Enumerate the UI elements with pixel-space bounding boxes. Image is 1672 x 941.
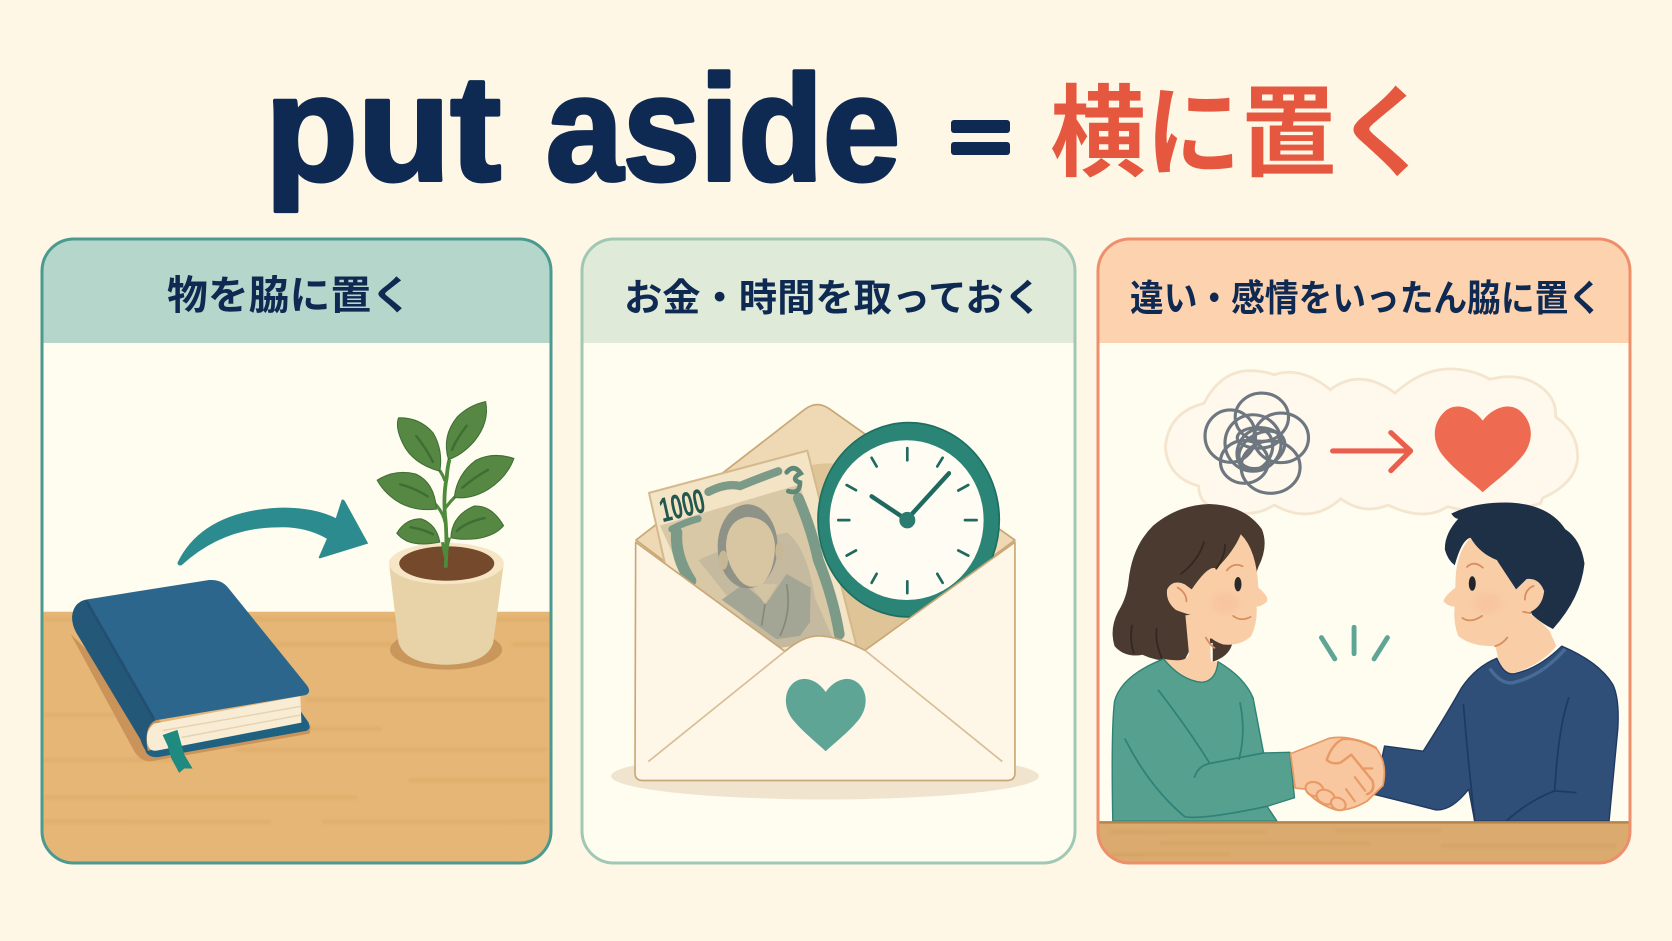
person: woman: [1112, 504, 1294, 821]
title: word put: put: [265, 44, 501, 212]
icon: potted plant: [377, 402, 514, 670]
banknote denomination: 1000: [656, 482, 709, 530]
panel 2 heading: お金・時間を取っておく: [624, 278, 1042, 320]
arrow: tangle to heart: [1333, 433, 1411, 471]
spark marks: [1321, 627, 1387, 659]
scene: book moved beside plant: [30, 402, 570, 873]
envelope front: [635, 542, 1015, 780]
banknote: [649, 451, 860, 660]
envelope fold lines: [648, 650, 1002, 762]
arrow: book to plant: [177, 500, 368, 565]
panel: objects: [30, 239, 570, 873]
panel 3 heading: 違い・感情をいったん脇に置く: [1130, 278, 1602, 319]
panel 1 heading: 物を脇に置く: [167, 274, 412, 318]
panel 3 border: [1098, 239, 1630, 863]
panel 2 border: [582, 239, 1075, 863]
title: word aside: aside: [546, 44, 900, 212]
person: man: [1374, 502, 1618, 821]
title: equals sign: [951, 120, 1010, 155]
panel 1 header band: [42, 239, 551, 343]
panel 1 border: [42, 239, 551, 863]
banknote ornaments: [672, 468, 839, 634]
scene: envelope with bill and clock: [611, 405, 1039, 799]
icon: heart seal: [786, 679, 866, 751]
title: japanese meaning: 横に置く: [1050, 78, 1432, 190]
thought cloud: [1165, 369, 1578, 514]
panel 1 background: [42, 239, 551, 863]
wooden table: [44, 612, 550, 862]
panel 2 header band: [582, 239, 1075, 343]
table edge: [1100, 821, 1628, 862]
panel 3 header band: [1098, 239, 1630, 343]
icon: heart: [1435, 407, 1531, 492]
envelope inner shade: [810, 463, 937, 650]
panel 2 background: [582, 239, 1075, 863]
title: [265, 44, 1432, 212]
envelope shadow: [611, 753, 1039, 799]
panel: money and time: [582, 239, 1075, 863]
panel 3 background: [1098, 239, 1630, 863]
icon: clock: [818, 423, 999, 617]
icon: tangled scribble: [1205, 393, 1308, 493]
scene: two people shaking hands: [1090, 369, 1640, 867]
icon: book: [71, 580, 311, 773]
icon: handshake: [1291, 737, 1384, 813]
panel: setting aside differences: [1090, 239, 1640, 867]
envelope back flap: [636, 405, 1015, 651]
banknote portrait: [718, 504, 811, 639]
